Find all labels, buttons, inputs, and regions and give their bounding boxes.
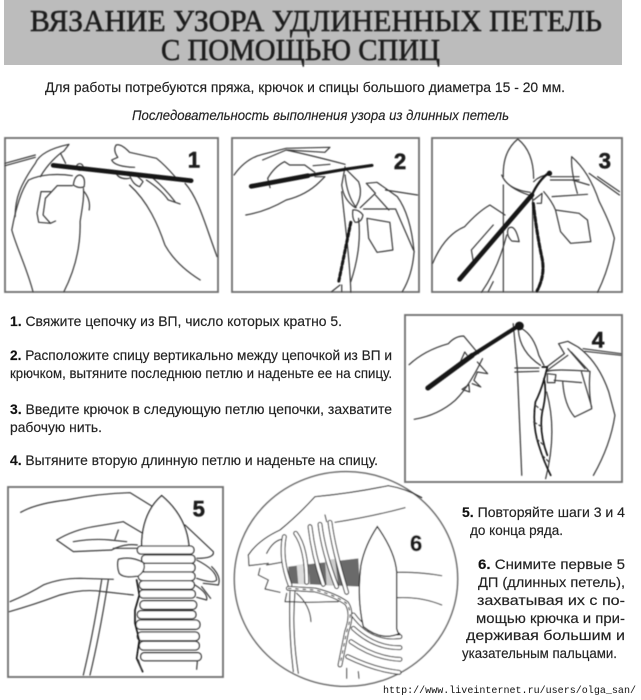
title banner <box>4 0 622 67</box>
panel: step 4 illustration <box>405 315 622 482</box>
instructions: steps 1 to 4: 3. Введите крючок в следующую петлю цепочки, захватите <box>10 401 392 417</box>
panel: step 2 illustration <box>232 138 419 292</box>
step number 1: 1 <box>188 147 200 172</box>
thumb <box>118 558 144 577</box>
needle <box>359 527 400 636</box>
panel: step 1 illustration <box>5 138 218 292</box>
step number 2: 2 <box>394 149 406 174</box>
instructions: steps 1 to 4: 2. Расположите спицу вертикально между цепочкой из ВП и <box>10 347 392 363</box>
instructions: steps 1 to 4: 4. Вытяните вторую длинную петлю и наденьте на спицу. <box>10 452 378 468</box>
intro text: Для работы потребуются пряжа, крючок и спицы большого диаметра 15 - 20 мм. <box>45 79 565 95</box>
step number 3: 3 <box>599 148 611 173</box>
panel: step 5 illustration <box>8 487 223 677</box>
needle tip <box>142 496 189 547</box>
step number 6: 6 <box>410 531 422 556</box>
instructions: steps 1 to 4: крючком, вытяните последнюю петлю и наденьте ее на спицу. <box>10 365 392 381</box>
step number 5: 5 <box>193 496 205 521</box>
loops on needle <box>348 615 400 672</box>
instructions: steps 5 and 6: 6. Снимите первые 5 <box>478 556 625 572</box>
instructions: steps 1 to 4: рабочую нить. <box>10 419 102 435</box>
source url watermark: http://www.liveinternet.ru/users/olga_san/ <box>383 685 636 697</box>
panel: step 3 illustration <box>432 138 622 292</box>
instructions: steps 5 and 6: захватывая их с по- <box>477 592 625 608</box>
instructions: steps 5 and 6: держивая большим и <box>466 627 625 643</box>
wrapped loops <box>136 546 201 661</box>
instructions: steps 1 to 4 <box>10 313 392 468</box>
instructions: steps 5 and 6: мощью крючка и при- <box>476 610 625 626</box>
instructions: steps 5 and 6: указательным пальцами. <box>462 645 617 661</box>
panel: step 6 circular illustration <box>234 472 458 686</box>
instructions: steps 5 and 6 <box>462 504 625 661</box>
title banner: ВЯЗАНИЕ УЗОРА УДЛИНЕННЫХ ПЕТЕЛЬ <box>30 3 602 38</box>
loops on fingers <box>283 522 347 592</box>
step number 4: 4 <box>592 328 605 352</box>
instructions: steps 5 and 6: 5. Повторяйте шаги 3 и 4 <box>462 504 625 520</box>
subheading: Последовательность выполнения узора из длинных петель <box>132 107 509 123</box>
instructions: steps 5 and 6: до конца ряда. <box>470 522 563 538</box>
chain <box>288 588 350 665</box>
instructions: steps 5 and 6: ДП (длинных петель), <box>478 574 625 590</box>
dark shaded gap behind loops <box>288 558 360 587</box>
instructions: steps 1 to 4: 1. Свяжите цепочку из ВП, число которых кратно 5. <box>10 313 342 329</box>
title banner: С ПОМОЩЬЮ СПИЦ <box>161 32 440 67</box>
